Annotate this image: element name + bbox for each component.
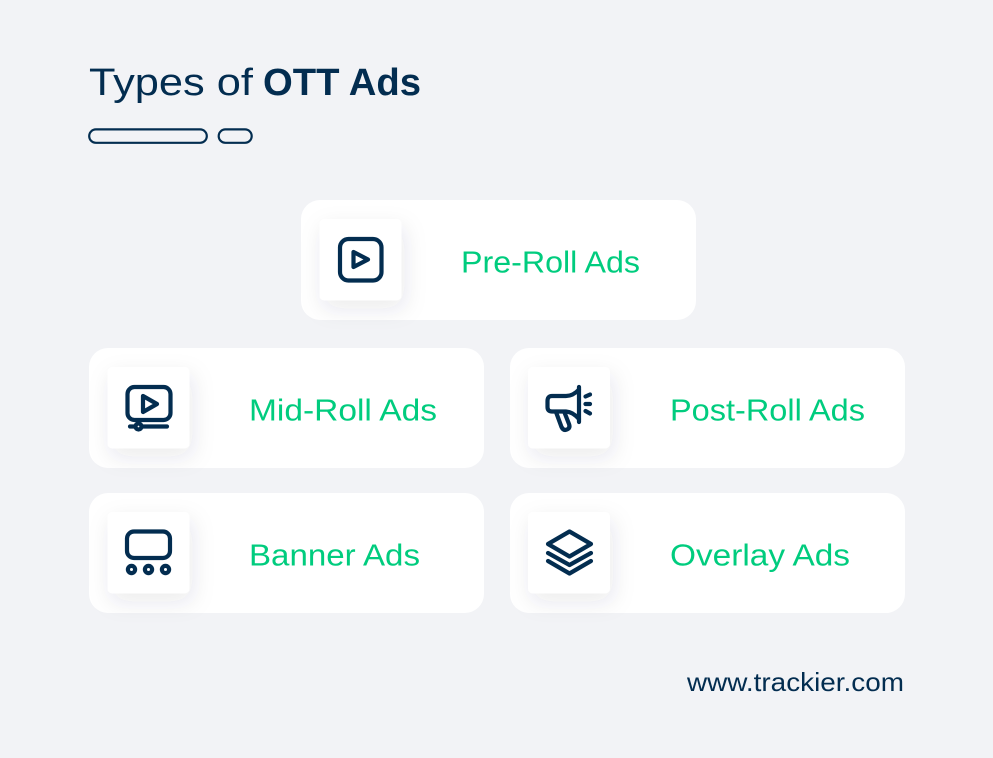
panel: Pre-Roll Ads [301,200,696,320]
icon: megaphone [548,387,590,430]
panel: Post-Roll Ads: Post-Roll Ads [670,392,865,428]
title [89,62,421,104]
panel: Mid-Roll Ads: Mid-Roll Ads [249,392,437,428]
panel: Pre-Roll Ads: Pre-Roll Ads [461,244,640,280]
panel: Overlay Ads: Overlay Ads [670,538,850,572]
title: Types of [89,62,253,104]
panel: Mid-Roll Ads [89,348,484,468]
panel: Overlay Ads [510,493,905,613]
icon: stacked layers [548,532,591,574]
panel: Banner Ads [89,493,484,613]
footer website url: www.trackier.com [686,667,904,697]
icon: video player with timeline [128,387,170,430]
title: OTT Ads [263,62,421,104]
icon: play button [340,239,382,280]
icon: banner with three dots [127,532,170,573]
title underline pills [89,129,252,143]
panel: Post-Roll Ads [510,348,905,468]
panel: Banner Ads: Banner Ads [249,538,420,572]
